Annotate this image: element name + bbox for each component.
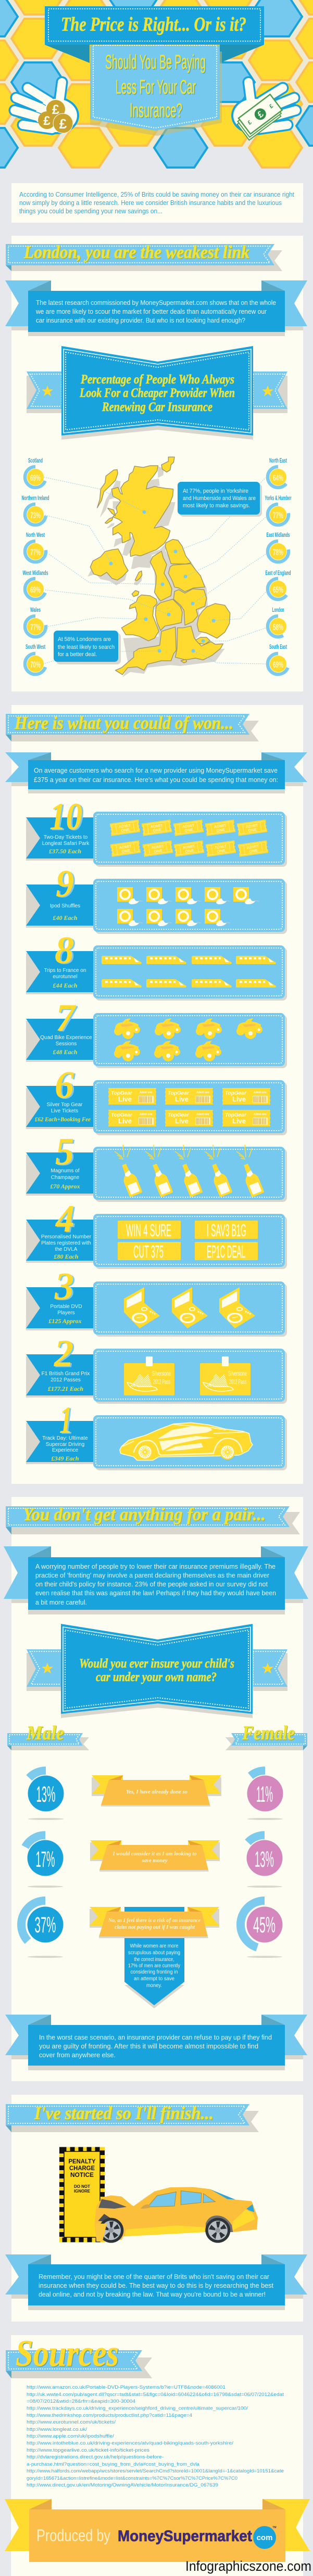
item 1: track day supercar <box>26 1399 287 1470</box>
icon: left hand with pound coins: £ <box>43 114 51 128</box>
icon group: Silverstone passes: 2012 Pass <box>229 1378 246 1386</box>
penalty charge notice sign <box>59 2147 105 2242</box>
heading ribbon: Here is what you could of won: Here is what you could of won... <box>14 713 233 733</box>
ring: South East: South East <box>269 643 287 650</box>
callout: Yorkshire and Wales <box>178 482 262 517</box>
source links: http://www.direct.gov.uk/en/Motoring/OwningAVehicle/MotorInsurance/DG_067639 <box>27 2482 218 2488</box>
source links: http://www.longleat.co.uk/ <box>27 2427 87 2432</box>
panel: what you could have won <box>11 705 303 1484</box>
stat: male no, risk 37% <box>21 1901 69 1958</box>
icon group: Top Gear tickets: TopGear <box>168 1091 190 1096</box>
item 3: portable DVD players: 3 <box>54 1265 74 1308</box>
item 6: Top Gear Live tickets: 6 <box>55 1064 74 1107</box>
icon group: admit one tickets: ONE <box>248 827 257 833</box>
icon group: Top Gear tickets: Admit one <box>254 1113 267 1116</box>
source links: =08/07/2012&wtid=28&rfrr=&eapid=300-30004 <box>27 2399 135 2404</box>
icon group: admit one tickets: ADMIT <box>246 843 259 850</box>
panel: intro: now simply by doing a little research. Here we consider British insurance habits and the luxurious <box>19 199 282 207</box>
item 5: magnums of champagne: 5 <box>55 1131 74 1173</box>
item 4: personalised number plates: 4 <box>55 1198 74 1240</box>
item 7: quad bike sessions <box>26 997 287 1068</box>
heading ribbon: London, you are the weakest link: London, you are the weakest link <box>23 242 249 262</box>
icon: right hand with banknotes: £ <box>247 119 253 126</box>
item 4: personalised number plates: Plates registered with <box>41 1240 91 1246</box>
band: worrying number: A worrying number of people try to lower their car insurance premiums illegally. The <box>35 1562 276 1570</box>
item 3: portable DVD players: Portable DVD <box>50 1304 82 1310</box>
icon group: admit one tickets: ADMIT <box>182 843 195 850</box>
band: remember: insurance when they could be. The best way to do this is by researching the best <box>39 2282 273 2289</box>
item 8: eurotunnel trips: £44 Each <box>52 982 78 989</box>
icon group: Top Gear tickets: Admit one <box>196 1091 209 1094</box>
band: worrying number: even realise that this was against the law! Perhaps if they had they would have been <box>35 1589 276 1597</box>
stat: female already done so 11% <box>242 1771 288 1820</box>
item 10: Longleat tickets <box>26 796 287 867</box>
icon group: admit one tickets: ONE <box>153 827 161 833</box>
ring: East of England: 65% <box>273 585 283 595</box>
item 10: Longleat tickets: Longleat Safari Park <box>42 841 90 847</box>
icon: right hand with banknotes: £ <box>256 109 266 120</box>
panel: started so I'll finish <box>11 2095 303 2322</box>
heading ribbon: Here is what you could of won <box>6 713 259 741</box>
heading ribbon: I've started so I'll finish: I've started so I'll finish... <box>34 2103 214 2123</box>
callout: Yorkshire and Wales: and Humberside and Wales are <box>183 495 256 502</box>
callout: Yorkshire and Wales: most likely to make savings. <box>183 503 250 509</box>
icon: left hand with pound coins: £ <box>59 116 67 132</box>
icon group: admit one tickets: ONE <box>154 848 162 854</box>
source links: goryId=165671&action=listrefine&mode=list&constraints=%7C%7Csor%7C%7CPrice%7C%7C0 <box>27 2476 237 2481</box>
icon group: Top Gear tickets: TopGear <box>111 1112 133 1118</box>
ribbon: no, risk of claim: claim not paying out if I was caught <box>115 1924 195 1930</box>
icon group: admit one tickets: ONE <box>185 848 194 854</box>
ribbon: yes already done <box>92 1775 221 1806</box>
band: remember <box>5 2254 307 2310</box>
arrow callout: women more scrupulous <box>124 1907 184 2008</box>
ring: North East: North East <box>269 457 287 464</box>
icon group: trains <box>102 956 276 988</box>
ring: West Midlands: 69% <box>30 585 41 595</box>
ribbon: yes already done: Yes, I have already done so <box>126 1789 187 1795</box>
icon group: Top Gear tickets <box>108 1088 270 1126</box>
ring: North East <box>268 457 289 488</box>
icon group: number plates: I SAV3 B1G <box>207 1221 246 1240</box>
item 6: Top Gear Live tickets: £62 Each+Booking Fee <box>34 1116 91 1123</box>
source links <box>27 2385 284 2488</box>
ribbon: would consider <box>90 1840 220 1872</box>
icon group: Top Gear tickets: Admit one <box>140 1091 153 1094</box>
penalty charge notice sign: NOTICE <box>70 2171 94 2178</box>
band: worst case scenario: you are guilty of fronting. After this it will become almost impossible to find <box>39 2042 258 2050</box>
ring: East of England <box>266 569 291 599</box>
ribbon: would consider: I would consider it as I am looking to <box>112 1851 197 1857</box>
callout: London: At 58% Londoners are <box>58 636 111 643</box>
ring: East of England: East of England <box>266 569 291 576</box>
stat: male would consider 17% <box>22 1835 68 1888</box>
bow-tie heading: insure your child's car: Would you ever insure your child's <box>79 1657 234 1671</box>
ring: Wales: Wales <box>30 606 41 613</box>
leader lines and region dots <box>44 477 266 664</box>
icon: supercar <box>120 1422 253 1460</box>
icon group: Top Gear tickets: Admit one <box>196 1113 209 1116</box>
icon group: ipods <box>117 887 259 926</box>
callout: Yorkshire and Wales: At 77%, people in Yorkshire <box>183 488 248 494</box>
icon group: admit one tickets: ADMIT <box>245 823 258 829</box>
stat: female already done so 11%: 11% <box>256 1782 273 1807</box>
icon group: admit one tickets: ADMIT <box>214 843 227 850</box>
bow-tie heading: insure your child's car <box>27 1624 287 1718</box>
icon group: DVD players <box>124 1287 255 1328</box>
band: worrying number: a bit more careful. <box>35 1598 87 1606</box>
source links: http://www.eurotunnel.com/uk/tickets/ <box>27 2419 116 2425</box>
ring: London: London <box>272 606 284 613</box>
band: remember: deal online, and not by breaking the law. That way you're bound to be a winner! <box>39 2290 266 2298</box>
ring: Yorks & Humber: 77% <box>273 510 283 520</box>
stat: male no, risk 37%: 37% <box>34 1913 56 1938</box>
column header: Male: Male <box>26 1722 64 1744</box>
ring: South West: South West <box>26 643 45 650</box>
band: average customers save 375 <box>5 752 307 793</box>
subtitle text <box>105 52 206 122</box>
logo: MoneySupermarket.com: MoneySupermarket <box>118 2528 252 2545</box>
source links: http://www.topgearlive.co.uk/ticket-info/ticket-prices <box>27 2447 149 2453</box>
item 4: personalised number plates: Personalised Number <box>41 1234 92 1240</box>
ring: Wales <box>25 606 46 637</box>
ring: East Midlands: 78% <box>273 547 283 557</box>
callout: London: for a better deal. <box>58 651 97 658</box>
item 3: portable DVD players: £125 Approx <box>48 1317 82 1325</box>
band: worst case scenario <box>5 2015 307 2070</box>
item 5: magnums of champagne: Champagne <box>51 1175 80 1181</box>
icon group: admit one tickets: ADMIT <box>214 823 227 829</box>
ring: Northern Ireland <box>22 494 49 525</box>
arrow callout: women more scrupulous: 17% of men are currently <box>128 1963 180 1969</box>
band: latest research <box>5 280 307 336</box>
stat: female no, risk 45%: 45% <box>253 1913 276 1938</box>
icon group: Silverstone passes: 2012 Pass <box>153 1378 170 1386</box>
panel: London section <box>11 236 303 691</box>
source links: http://dvlaregistrations.direct.gov.uk/help/questions-before- <box>27 2454 164 2460</box>
band: worrying number: on their child's policy for instance. 23% of the people asked in our survey did not <box>35 1580 268 1588</box>
item 8: eurotunnel trips: 8 <box>55 929 74 972</box>
item 5: magnums of champagne <box>26 1131 287 1202</box>
ring: South West <box>25 643 46 674</box>
item 1: track day supercar: £349 Each <box>51 1455 79 1462</box>
item 8: eurotunnel trips <box>26 929 287 1001</box>
item 4: personalised number plates: £80 Each <box>53 1253 79 1260</box>
ring: Yorks & Humber <box>265 494 292 525</box>
panel: intro <box>11 183 303 223</box>
icon group: admit one tickets: ADMIT <box>151 843 164 850</box>
band: latest research: The latest research commissioned by MoneySupermarket.com shows that on the whole <box>36 299 276 306</box>
icon: right hand with banknotes: £ <box>268 103 274 110</box>
item 8: eurotunnel trips: eurotunnel <box>53 974 78 980</box>
footer banner: produced by MoneySupermarket: Produced by <box>36 2526 110 2545</box>
bow-tie heading: percentage of people: Look For a Cheaper Provider When <box>79 386 235 400</box>
band: latest research: we are more likely to scour the market for better deals than automatically renew our <box>35 307 267 315</box>
icon group: admit one tickets: ADMIT <box>150 823 163 829</box>
item 2: F1 British Grand Prix passes: F1 British Grand Prix <box>42 1371 90 1377</box>
hexagon honeycomb header background <box>0 0 313 168</box>
icon group: Top Gear tickets: TopGear <box>225 1091 247 1096</box>
icon group: Top Gear tickets: Live <box>118 1095 132 1103</box>
heading ribbon: London, you are the weakest link <box>6 242 282 271</box>
bow-tie heading: percentage of people: Renewing Car Insurance <box>102 400 212 414</box>
icon group: Top Gear tickets: TopGear <box>111 1091 133 1096</box>
ring: Northern Ireland: 73% <box>30 510 41 520</box>
icon group: Silverstone passes: Silverstone <box>152 1369 171 1377</box>
item 9: iPod shuffles <box>26 863 287 934</box>
icon group: Silverstone passes <box>124 1356 251 1395</box>
ring charts: right column regions <box>265 457 292 674</box>
callout: London: the least likely to search <box>58 644 115 650</box>
item 6: Top Gear Live tickets: Live Tickets <box>51 1108 78 1114</box>
icon: right hand with banknotes <box>231 82 296 140</box>
ring: Yorks & Humber: Yorks & Humber <box>265 494 292 502</box>
title text: The Price is Right... Or is it? <box>61 14 246 35</box>
arrow callout: women more scrupulous: considering fronting in <box>130 1969 178 1975</box>
item 1: track day supercar: Experience <box>52 1447 78 1453</box>
ribbon: no, risk of claim <box>90 1907 219 1938</box>
item 7: quad bike sessions: 7 <box>56 997 77 1040</box>
item 3: portable DVD players <box>26 1265 287 1337</box>
band: latest research: car insurance with our existing provider. But who is not looking hard enough? <box>36 316 245 324</box>
icon group: number plates <box>118 1221 258 1261</box>
subtitle text: Insurance? <box>130 100 182 122</box>
map of the UK <box>87 457 230 677</box>
ring: West Midlands: West Midlands <box>23 569 48 576</box>
ring: North West: North West <box>26 531 45 539</box>
heading ribbon: I've started so I'll finish <box>6 2103 259 2132</box>
item 1: track day supercar: 1 <box>59 1399 72 1442</box>
item 7: quad bike sessions: Quad Bike Experience <box>40 1035 92 1041</box>
stat: male already done so 13%: 13% <box>36 1782 55 1807</box>
band: remember: Remember, you might be one of the quarter of Brits who isn't saving on their car <box>39 2273 270 2280</box>
band: worrying number <box>4 1546 308 1614</box>
penalty charge notice sign: PENALTY <box>69 2158 96 2165</box>
item 5: magnums of champagne: Magnums of <box>51 1168 80 1174</box>
ring: North East: 64% <box>273 473 283 483</box>
panel: fronting section <box>11 1497 303 2081</box>
item 10: Longleat tickets: Two-Day Tickets to <box>44 835 88 840</box>
ribbon: no, risk of claim: No, as I feel there is a risk of an insurance <box>108 1917 201 1924</box>
ring: East Midlands <box>267 531 290 562</box>
heading ribbon: You don't get anything for a pair: You don't get anything for a pair... <box>23 1504 266 1524</box>
item 9: iPod shuffles: £40 Each <box>52 914 78 921</box>
arrow callout: women more scrupulous: While women are more <box>130 1943 179 1949</box>
panel: intro: According to Consumer Intelligence, 25% of Brits could be saving money on their car insurance right <box>19 191 294 198</box>
panel: intro: things you could be spending your new savings on... <box>19 208 162 215</box>
logo: MoneySupermarket.com: com <box>257 2533 272 2542</box>
item 5: magnums of champagne: £70 Approx <box>49 1183 80 1190</box>
band: worst case scenario: cover from anywhere else. <box>39 2051 116 2059</box>
icon: left hand with pound coins <box>15 82 79 134</box>
item 2: F1 British Grand Prix passes: 2012 Passes <box>51 1377 81 1383</box>
ring: West Midlands <box>23 569 48 599</box>
item 1: track day supercar: Track Day: Ultimate <box>42 1436 88 1441</box>
icon group: admit one tickets: ONE <box>217 848 226 854</box>
source links: http://www.halfords.com/webapp/wcs/stores/servlet/SearchCmd?storeId=10001&langId=-1&catalogId=10151&cate <box>27 2468 284 2474</box>
icon group: admit one tickets: ONE <box>184 827 193 833</box>
item 1: track day supercar: Supercar Driving <box>46 1442 84 1447</box>
arrow callout: women more scrupulous: scrupulous about paying <box>128 1950 180 1956</box>
icon group: admit one tickets <box>110 819 268 857</box>
ring: Scotland <box>25 457 46 488</box>
item 7: quad bike sessions: Sessions <box>56 1041 77 1047</box>
bow-tie heading: percentage of people <box>27 346 287 440</box>
ring: East Midlands: East Midlands <box>267 531 290 539</box>
arrow callout: women more scrupulous: the correct insurance, <box>134 1957 174 1963</box>
band: average customers save 375: £375 a year on their car insurance. Here's what you could be spending that money on: <box>34 776 278 784</box>
source links: http://www.apple.com/uk/ipodshuffle/ <box>27 2433 114 2439</box>
icon group: number plates: CUT 375 <box>133 1242 164 1261</box>
icon group: admit one tickets: ONE <box>249 848 258 854</box>
arrow callout: women more scrupulous: an attempt to save <box>134 1976 174 1982</box>
heading ribbon: Sources: Sources <box>16 2333 119 2374</box>
icon group: Top Gear tickets: Live <box>232 1095 246 1103</box>
band: average customers save 375: On average customers who search for a new provider using MoneySupermarket save <box>34 766 278 774</box>
icon group: admit one tickets: ONE <box>121 848 130 854</box>
icon group: number plates: EP1C DEAL <box>207 1242 245 1261</box>
ring: London <box>268 606 289 637</box>
icon group: quad bikes <box>114 1018 262 1061</box>
ring: South East: 69% <box>273 660 283 670</box>
ring charts: left column regions <box>22 457 49 674</box>
stat: female no, risk 45% <box>241 1901 289 1958</box>
source links: a-purchase.html?question=cost_buying_from_dvla#cost_buying_from_dvla <box>27 2462 200 2467</box>
penalty charge notice sign: CHARGE <box>69 2164 95 2172</box>
icon group: Top Gear tickets: Admit one <box>140 1113 153 1116</box>
penalty charge notice sign: DO NOT <box>74 2184 90 2189</box>
ring: North West <box>25 531 46 562</box>
icon group: Top Gear tickets: Live <box>118 1117 132 1125</box>
panel: sources <box>11 2335 303 2576</box>
item 6: Top Gear Live tickets: Silver Top Gear <box>47 1102 83 1108</box>
source links: http://www.thedrinkshop.com/products/productlist.php?catid=11&page=4 <box>27 2413 192 2418</box>
source links: http://uk.wwte4.com/pub/agent.dll?qscr=tsdt&stat=5&flgc=0&loid=6046224&ofid=16798&sdat=06/07/2012&edat <box>27 2392 284 2398</box>
item 2: F1 British Grand Prix passes: £177.21 Each <box>47 1385 83 1392</box>
ring: London: 58% <box>273 622 283 632</box>
ring: Scotland: Scotland <box>28 457 43 464</box>
stat: female would consider 13%: 13% <box>255 1847 274 1872</box>
ring: Northern Ireland: Northern Ireland <box>22 494 49 502</box>
item 10: Longleat tickets: £37.50 Each <box>48 848 81 855</box>
source links: http://www.trackdays.co.uk/driving_experience/seighford_driving_centre/ultimate_supercar/100/ <box>27 2406 248 2411</box>
ring: Wales: 77% <box>30 622 41 632</box>
logo: MoneySupermarket.com: TM <box>272 2526 277 2529</box>
icon group: Silverstone passes: Silverstone <box>228 1369 247 1377</box>
item 2: F1 British Grand Prix passes <box>26 1332 287 1404</box>
column header: Female <box>226 1722 307 1750</box>
item 2: F1 British Grand Prix passes: 2 <box>54 1332 73 1375</box>
ring: South West: 70% <box>30 660 41 670</box>
item 10: Longleat tickets: 10 <box>49 796 82 838</box>
callout: London <box>54 631 121 664</box>
footer banner: produced by MoneySupermarket <box>5 2499 310 2562</box>
stat: male would consider 17%: 17% <box>35 1847 55 1872</box>
column header: Male <box>7 1722 89 1750</box>
ring: South East <box>268 643 289 674</box>
item 9: iPod shuffles: Ipod Shuffles <box>50 903 80 909</box>
band: worst case scenario: In the worst case scenario, an insurance provider can refuse to pay up if they find <box>39 2033 272 2041</box>
icon group: admit one tickets: ADMIT <box>119 843 132 850</box>
ring: North West: 77% <box>30 547 41 557</box>
ring: Scotland: 69% <box>30 473 41 483</box>
icon group: number plates: WIN 4 SURE <box>126 1221 171 1240</box>
England and Wales <box>116 540 230 677</box>
item 9: iPod shuffles: 9 <box>56 863 74 905</box>
icon group: Top Gear tickets: TopGear <box>225 1112 247 1118</box>
arrow callout: women more scrupulous: money. <box>146 1983 162 1989</box>
source links: http://www.amazon.co.uk/Portable-DVD-Players-Systems/b?ie=UTF8&node=4086001 <box>27 2385 226 2390</box>
icon group: champagne bottles <box>115 1145 265 1197</box>
icon group: Top Gear tickets: Live <box>232 1117 246 1125</box>
icon group: Top Gear tickets: Live <box>175 1117 189 1125</box>
icon group: admit one tickets: ADMIT <box>182 823 195 829</box>
item 8: eurotunnel trips: Trips to France on <box>44 968 86 973</box>
band: worrying number: practice of 'fronting' may involve a parent declaring themselves as the main driver <box>35 1571 270 1579</box>
title banner <box>45 6 264 63</box>
item 4: personalised number plates: the DVLA <box>55 1247 78 1252</box>
item 3: portable DVD players: Players <box>57 1310 75 1316</box>
logo: MoneySupermarket.com <box>118 2526 277 2549</box>
crashed car <box>95 2187 258 2243</box>
icon group: admit one tickets: ONE <box>216 827 225 833</box>
stat: male already done so 13% <box>23 1771 69 1820</box>
ribbon: would consider: save money <box>142 1857 168 1864</box>
bow-tie heading: insure your child's car: car under your own name? <box>96 1670 217 1684</box>
item 6: Top Gear Live tickets <box>26 1064 287 1135</box>
subtitle text: Less For Your Car <box>116 76 196 98</box>
subtitle text: Should You Be Paying <box>105 52 206 73</box>
icon group: Top Gear tickets: TopGear <box>168 1112 190 1118</box>
icon group: admit one tickets: ONE <box>121 827 130 833</box>
source links: http://www.intotheblue.co.uk/driving-experiences/atv/quad-biking/quads-south-yorkshire/ <box>27 2440 233 2446</box>
stat: female would consider 13% <box>242 1835 287 1888</box>
column header: Female: Female <box>242 1722 295 1744</box>
item 4: personalised number plates <box>26 1198 287 1269</box>
Scotland and Northern Ireland <box>87 457 176 585</box>
icon group: admit one tickets: ADMIT <box>118 823 131 829</box>
icon: left hand with pound coins: £ <box>52 102 59 117</box>
heading ribbon: You don't get anything for a pair <box>6 1504 300 1534</box>
penalty charge notice sign: IGNORE <box>74 2189 91 2194</box>
bow-tie heading: percentage of people: Percentage of People Who Always <box>80 373 234 387</box>
icon group: Top Gear tickets: Live <box>175 1095 189 1103</box>
item 7: quad bike sessions: £48 Each <box>52 1048 78 1056</box>
subtitle shield <box>90 45 222 136</box>
icon group: Top Gear tickets: Admit one <box>254 1091 267 1094</box>
